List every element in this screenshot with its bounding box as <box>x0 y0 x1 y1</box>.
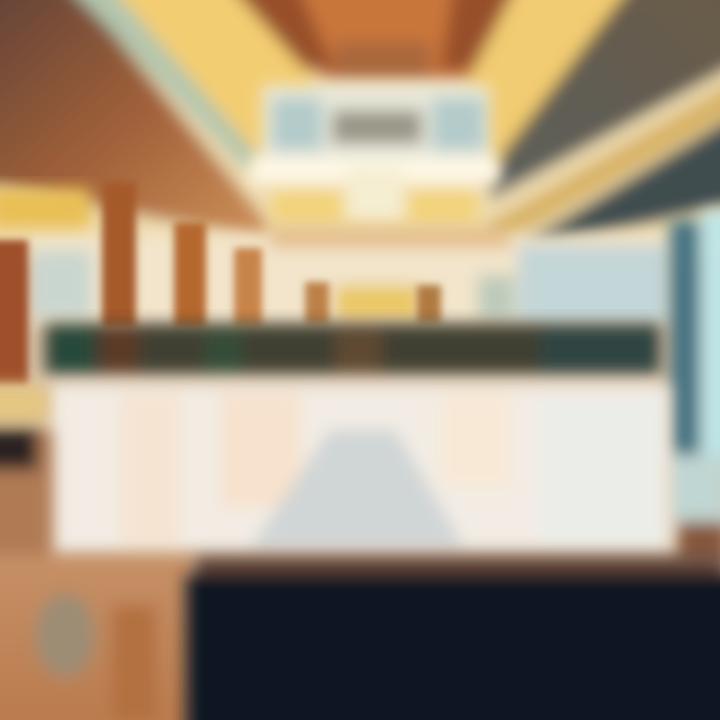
dark planter band <box>45 324 660 374</box>
pale blue strip <box>62 0 262 172</box>
back wall <box>30 228 680 325</box>
dark sofa foreground <box>186 556 720 720</box>
left foreground <box>0 385 195 720</box>
right grey soffit <box>490 0 720 200</box>
left yellow band <box>0 188 90 228</box>
wooden columns <box>0 182 441 385</box>
gold stripe <box>485 78 720 245</box>
left wooden ceiling <box>0 0 270 240</box>
left yellow cove <box>105 0 320 160</box>
skylight <box>250 85 500 224</box>
marble floor <box>50 384 670 552</box>
central wooden coffer <box>225 0 525 82</box>
dark slate soffit <box>520 112 720 245</box>
right column and window <box>668 210 720 564</box>
ceiling <box>0 0 720 260</box>
right yellow cove <box>465 0 640 170</box>
